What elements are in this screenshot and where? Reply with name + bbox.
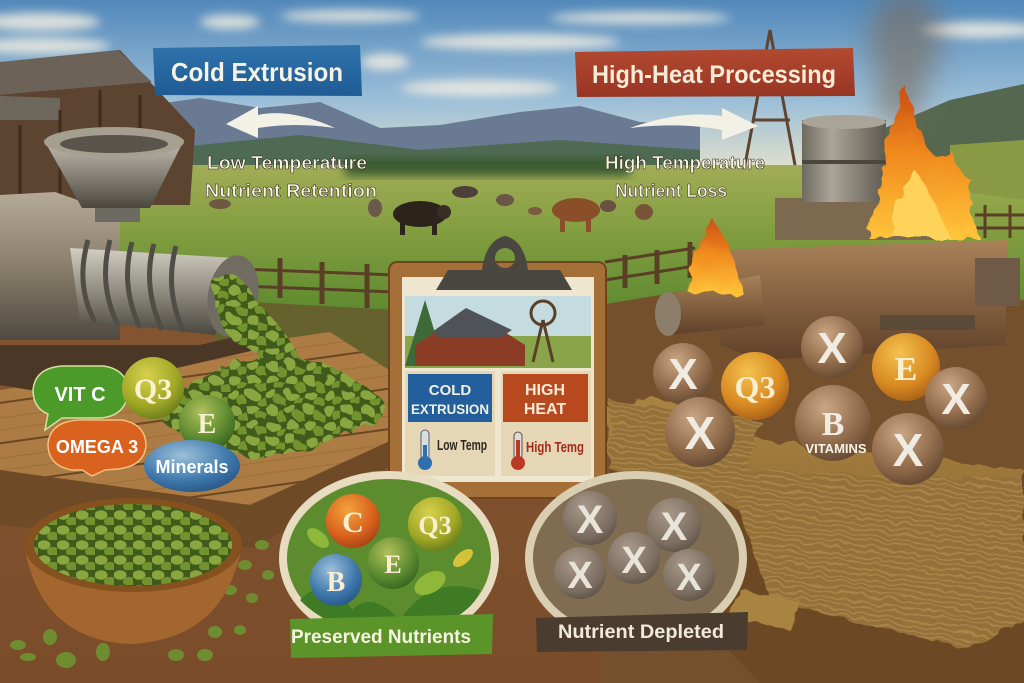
panel: cold extrusion: Low Temp: [437, 437, 487, 454]
badge: E: [367, 537, 419, 589]
badge: X: [647, 498, 701, 552]
panel: high heat: HIGH: [525, 382, 565, 399]
badge: X: [653, 343, 713, 403]
clip: [436, 236, 572, 290]
arrow: left: [226, 106, 335, 138]
badge: VIT C: VIT C: [54, 384, 106, 406]
arrow: right: [630, 108, 758, 140]
icon: hopper: [44, 127, 184, 222]
badge: X: [554, 547, 606, 599]
badge: E: E: [384, 550, 402, 579]
badge: X: [663, 549, 715, 601]
panel: preserved nutrients: [279, 471, 499, 645]
badge: X: [563, 491, 617, 545]
badge: X: X: [668, 350, 698, 399]
text: high temperature nutrient loss: [605, 153, 765, 201]
badge: Minerals: Minerals: [155, 457, 229, 477]
badge: X: X: [817, 324, 847, 373]
title: High-Heat Processing: High-Heat Processing: [592, 61, 836, 89]
wooden table: [0, 332, 392, 548]
label: nutrient depleted: [536, 612, 748, 652]
fence: [215, 205, 1024, 308]
barn: [0, 50, 195, 205]
panel: cold extrusion: COLD: [429, 382, 471, 399]
badge: VIT C: [33, 366, 128, 430]
cows in the field: [209, 186, 653, 235]
badge: E: E: [198, 409, 216, 440]
bowl of pellets: [24, 498, 242, 644]
text: high temperature nutrient loss: High Temperature: [605, 153, 765, 173]
badge: X: [925, 367, 987, 429]
screw barrel: [70, 240, 265, 341]
badge: X: [801, 316, 863, 378]
badge: B: [310, 554, 362, 606]
badge: B vitamins: [795, 385, 871, 461]
icon: windmill: [745, 30, 795, 165]
badge: X: X: [621, 540, 647, 582]
panel: high heat: [501, 371, 591, 476]
panel: cold extrusion: [405, 371, 495, 476]
furnace machine: [655, 115, 1020, 360]
badge: Omega 3: [48, 420, 146, 476]
fire: [688, 85, 980, 296]
badge: B: B: [327, 567, 345, 598]
panel: nutrient depleted: [525, 471, 747, 645]
badge: Q3: [122, 357, 184, 419]
text: high temperature nutrient loss: Nutrient Loss: [615, 181, 727, 201]
badge: X: X: [567, 555, 593, 597]
badge: B vitamins: B: [822, 406, 844, 443]
farm scene: [405, 296, 591, 368]
text: low temperature nutrient retention: [205, 153, 377, 201]
text: low temperature nutrient retention: Low Temperature: [207, 153, 367, 173]
panel: cold extrusion: EXTRUSION: [411, 401, 489, 417]
text: low temperature nutrient retention: Nutrient Retention: [205, 181, 377, 201]
badge: E: [179, 395, 235, 451]
leaves: [304, 524, 476, 600]
clipboard: [389, 236, 606, 498]
badge: Minerals: [144, 440, 240, 492]
badge: Q3: Q3: [134, 373, 172, 406]
badge: C: [326, 494, 380, 548]
badge: X: X: [685, 407, 716, 459]
extruder machine: [0, 127, 265, 395]
badge: X: X: [577, 498, 604, 542]
badge: X: X: [661, 505, 688, 549]
badge: X: X: [676, 557, 702, 599]
badge: Q3: Q3: [418, 511, 452, 540]
badge: Q3: [721, 352, 789, 420]
badge: C: C: [342, 506, 364, 539]
smoke: [869, 0, 941, 125]
label: nutrient depleted: Nutrient Depleted: [558, 622, 724, 643]
nutrient badges: right: [653, 316, 987, 485]
badge: X: X: [893, 424, 924, 476]
badge: B vitamins: VITAMINS: [805, 441, 867, 456]
badge: X: [872, 413, 944, 485]
nutrient badges: left: [33, 357, 240, 492]
panel: high heat: HEAT: [524, 401, 566, 418]
badge: X: [608, 532, 660, 584]
badge: Q3: Q3: [735, 369, 775, 405]
panel: high heat: High Temg: [526, 439, 584, 456]
badge: E: E: [895, 351, 917, 388]
barrel outlet: [655, 275, 765, 336]
badge: X: [665, 397, 735, 467]
badge: Omega 3: OMEGA 3: [56, 437, 138, 457]
label: preserved nutrients: [290, 614, 493, 658]
title: Cold Extrusion: [153, 45, 362, 96]
badge: E: [872, 333, 940, 401]
title: High-Heat Processing: [575, 48, 855, 97]
pellets pouring onto table: [10, 273, 388, 668]
dark ground under extruder and hay side: [215, 285, 1024, 683]
label: preserved nutrients: Preserved Nutrients: [291, 627, 471, 648]
badge: Q3: [408, 497, 462, 551]
badge: X: X: [941, 375, 971, 424]
title: Cold Extrusion: Cold Extrusion: [171, 57, 343, 87]
hay bales: [605, 395, 1024, 648]
